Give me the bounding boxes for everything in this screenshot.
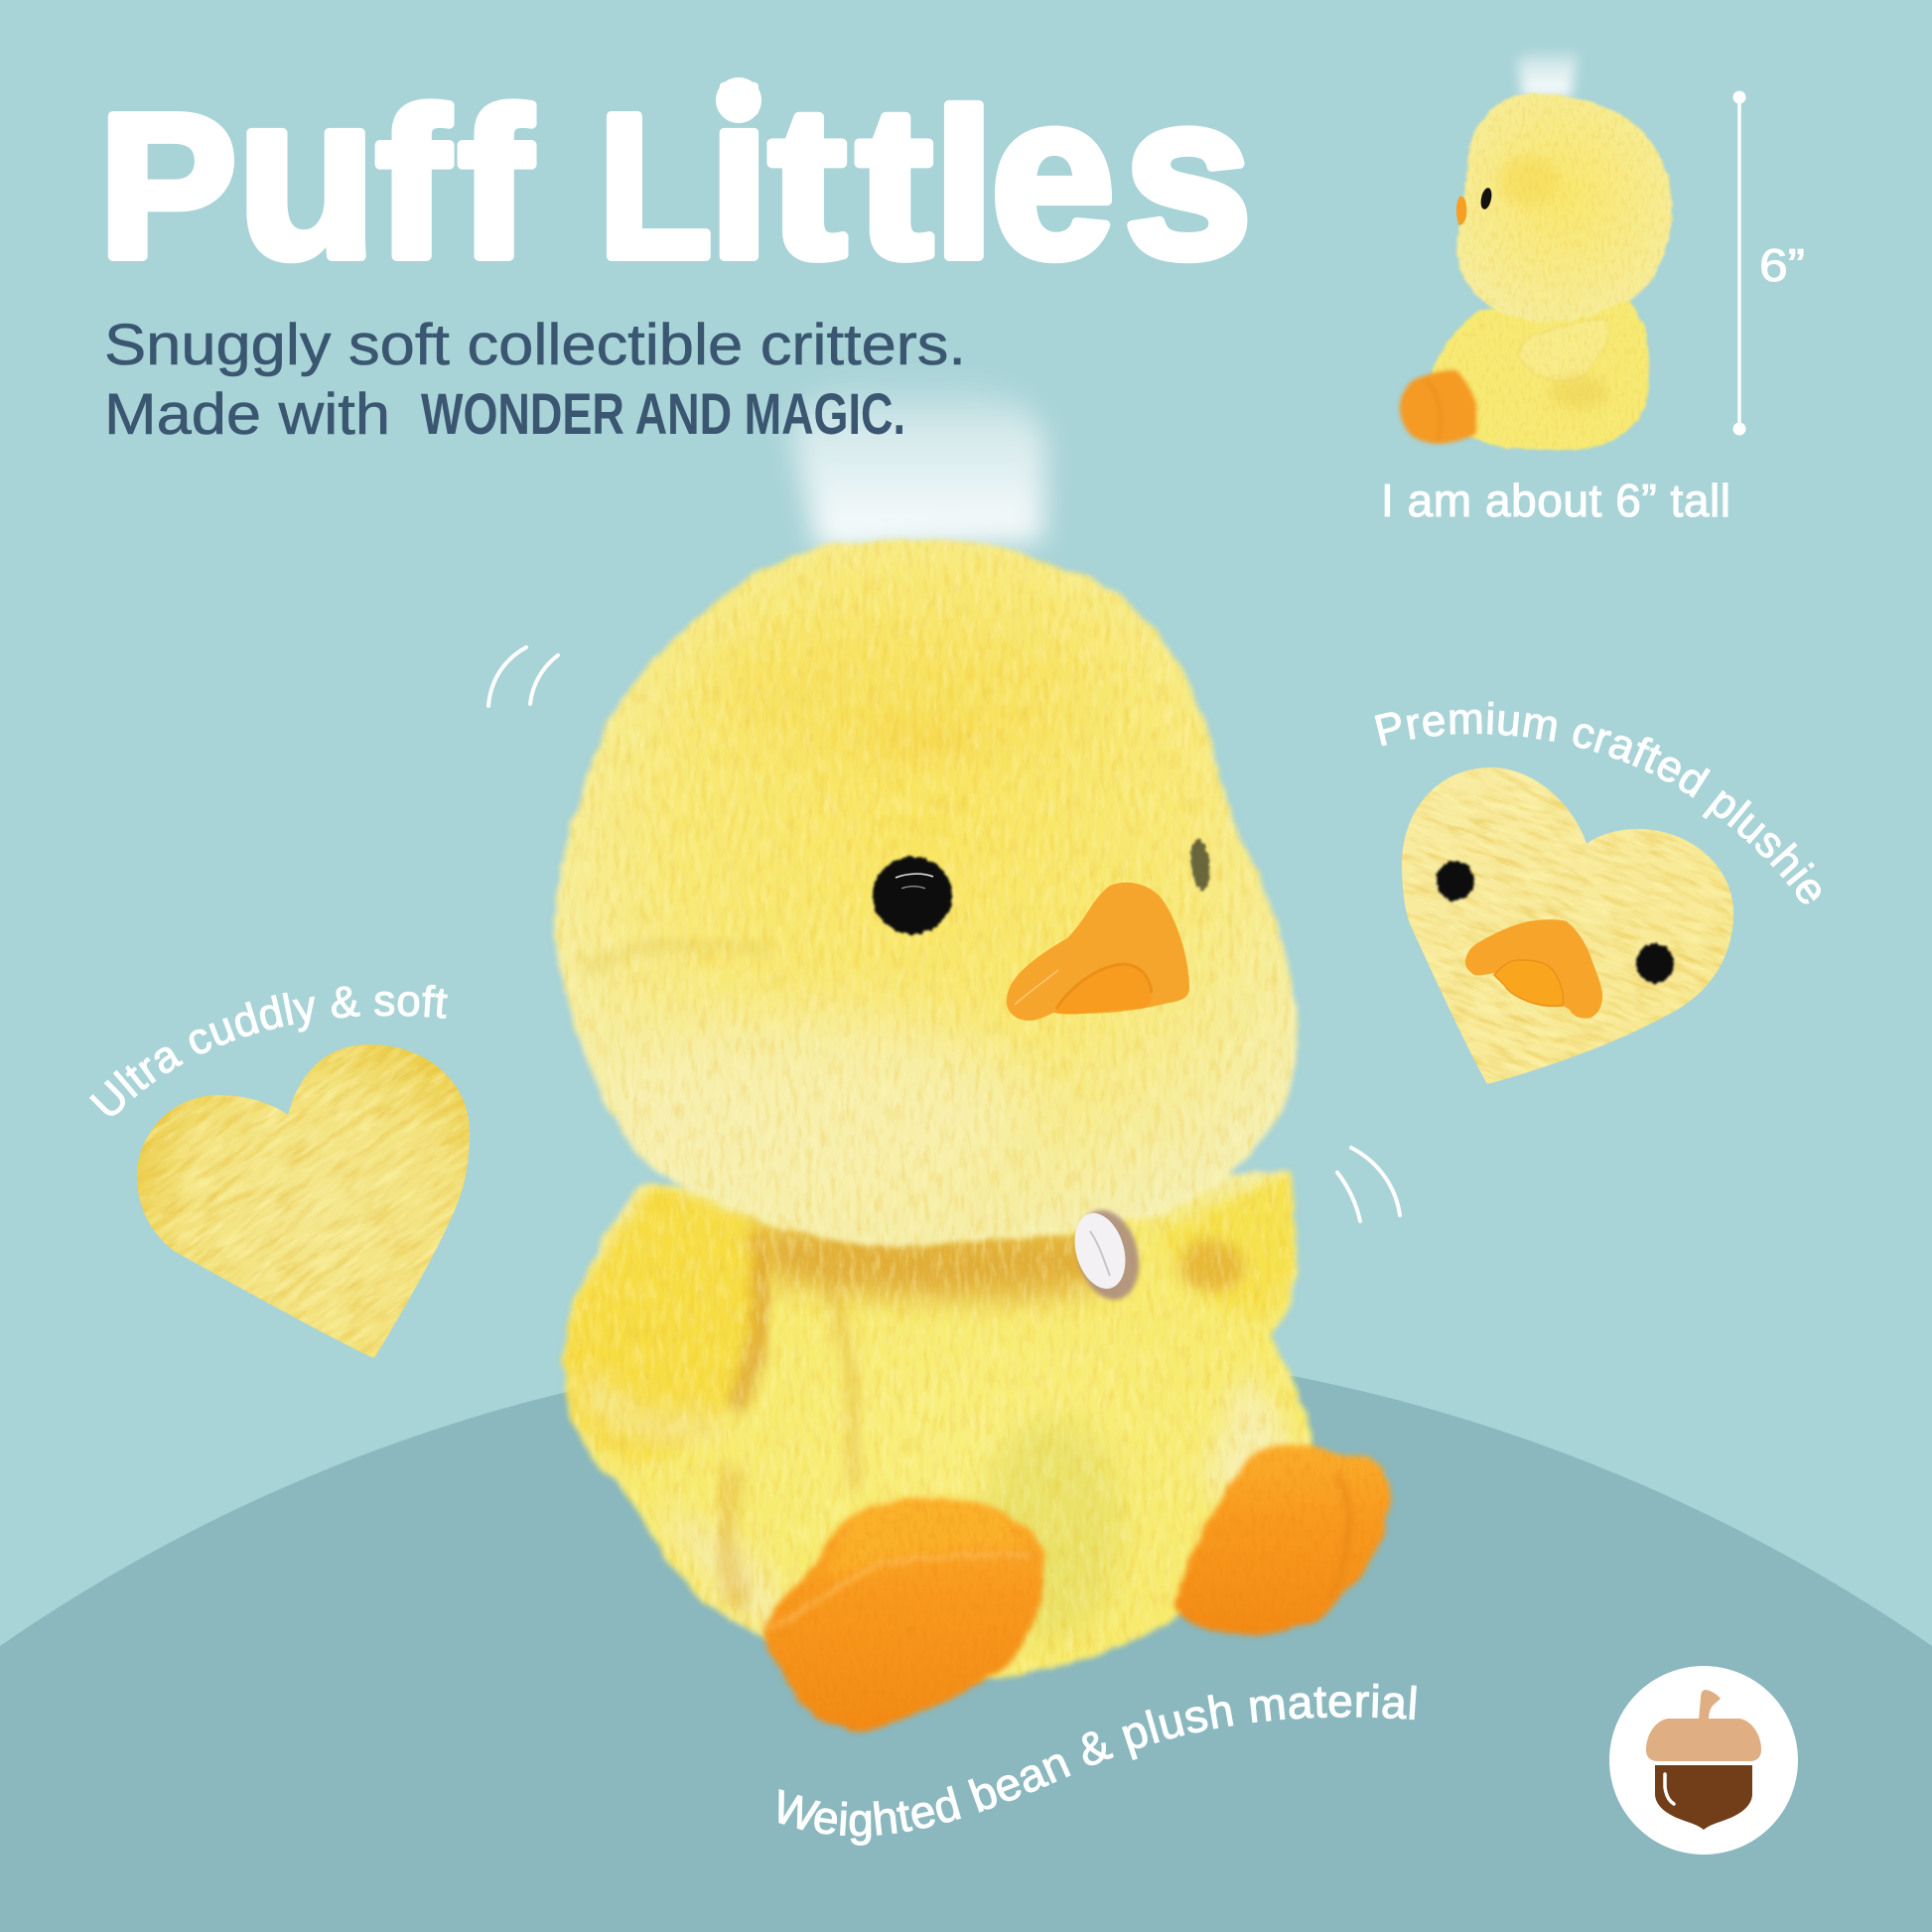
right eye xyxy=(1188,838,1212,892)
subtitle: WONDER AND MAGIC. xyxy=(421,382,905,447)
acorn nut xyxy=(1655,1765,1752,1830)
main duck plush xyxy=(556,375,1391,1730)
acorn stem xyxy=(1699,1690,1721,1721)
duck feet xyxy=(764,1443,1391,1730)
subtitle: Made with xyxy=(104,382,390,447)
title: i xyxy=(709,45,769,306)
heart: duck face closeup xyxy=(1300,661,1836,1190)
title: t xyxy=(857,63,932,302)
title: e xyxy=(991,45,1115,306)
curved label: Ultra cuddly & soft xyxy=(89,985,448,1116)
title: t xyxy=(769,63,846,302)
right arm xyxy=(1162,1172,1298,1316)
heart: fur swatch xyxy=(0,889,617,1514)
beak xyxy=(1007,883,1189,1021)
title: l xyxy=(934,68,994,301)
white head tuft xyxy=(792,375,1046,551)
left arm xyxy=(561,1181,769,1459)
title: u xyxy=(237,45,376,306)
neck tag xyxy=(1066,1203,1148,1307)
acorn highlight xyxy=(1665,1774,1674,1804)
title: f xyxy=(376,66,450,301)
height measure xyxy=(1733,91,1745,435)
height caption: I am about 6” tall xyxy=(1381,475,1730,526)
small duck eye xyxy=(1479,187,1493,210)
callout: premium crafted plushie xyxy=(1374,701,1821,1084)
title: P xyxy=(99,72,236,300)
heart eyes xyxy=(1437,861,1674,983)
title: s xyxy=(1124,45,1252,306)
title: L xyxy=(599,72,712,300)
small duck figure xyxy=(1433,93,1672,450)
acorn cap xyxy=(1646,1719,1761,1761)
curved label: Premium crafted plushie xyxy=(1374,701,1821,903)
small duck beak xyxy=(1456,197,1466,225)
left eye xyxy=(873,857,952,934)
small duck foot xyxy=(1400,370,1476,444)
duck head xyxy=(556,540,1298,1246)
motion lines: left xyxy=(488,647,558,706)
title xyxy=(99,45,1252,306)
callout: ultra cuddly and soft xyxy=(89,985,471,1358)
ground dome xyxy=(0,1344,1932,1932)
subtitle xyxy=(104,313,966,447)
duck body xyxy=(561,1172,1313,1679)
small duck tuft xyxy=(1517,49,1579,97)
heart beak xyxy=(1465,919,1602,1019)
title: f xyxy=(459,66,532,301)
small side-view duck with height xyxy=(1381,49,1805,526)
subtitle: Snuggly soft collectible critters. xyxy=(104,313,966,377)
icon: acorn logo badge xyxy=(1609,1666,1798,1855)
callout: weighted bean and plush material: Weighted bean & plush material xyxy=(778,1684,1417,1846)
height value: 6” xyxy=(1759,239,1805,291)
motion lines: right xyxy=(1337,1148,1400,1221)
